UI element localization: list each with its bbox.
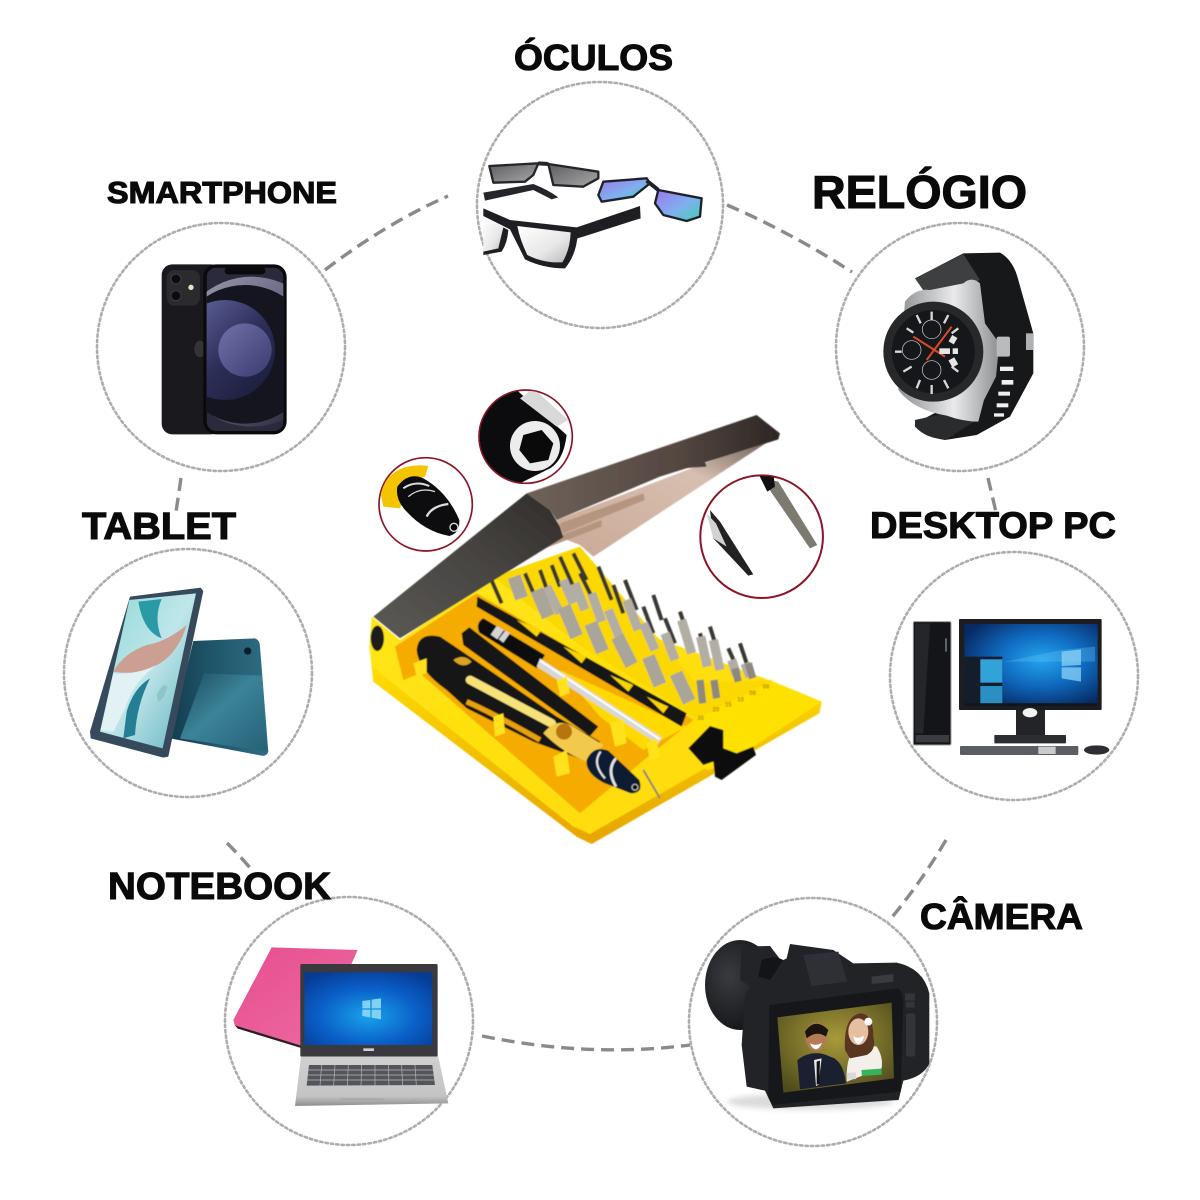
heading: desktop pc: DESKTOP PC [870,505,1116,546]
screen bezel [768,988,903,1105]
monitor [959,619,1102,710]
dashed connecting ring [176,196,996,1050]
lid band [527,415,780,520]
bit size labels: 08 [749,691,757,697]
upper temple arm [483,184,558,201]
icon: smartwatch [883,253,1033,440]
hinge [371,626,384,651]
detail circle: precision tips [700,473,823,598]
heading: câmera: CÂMERA [920,895,1083,937]
icon: tablet [90,588,268,758]
toolkit rim [372,667,822,844]
toolkit right tray [690,682,822,770]
circle: câmera [689,898,937,1146]
screwdriver handle [417,636,603,762]
circle: relógio [836,223,1084,471]
circle: notebook [225,897,473,1145]
heading: notebook: NOTEBOOK [108,866,332,908]
circle: tablet [64,549,312,797]
silver notebook base [295,1057,448,1106]
spare tip [643,770,660,798]
front tablet [90,588,203,758]
detail circle: chuck [379,458,472,551]
bit rows [490,553,753,703]
camera body [742,944,929,1108]
bit size labels [697,684,770,722]
lid underside [557,435,778,557]
circle: desktop pc [890,552,1138,800]
heading: smartphone: SMARTPHONE [107,175,337,210]
watch face [883,302,983,402]
rear phone [162,264,222,434]
icon: glasses [483,163,702,268]
blue clip-on [598,178,702,221]
icon: camera [705,940,929,1110]
lens [705,940,783,1030]
watch strap [915,253,1033,440]
watch steel case [898,280,999,422]
heading: óculos: ÓCULOS [514,36,673,78]
toolkit base [369,577,822,844]
screen photo [777,1003,894,1093]
bit size labels: 10 [737,698,745,704]
black clamp [688,726,756,780]
pink notebook [233,947,358,1048]
bit size labels: 15 [725,703,732,709]
silver notebook screen [300,964,438,1057]
back tablet [170,638,268,756]
ground shadow [727,1094,893,1110]
mouse [1084,745,1109,755]
heading: tablet: TABLET [82,506,236,548]
tray tabs [413,658,660,777]
bit size labels: 30 [697,716,705,722]
keyboard [960,746,1078,755]
strap link details [994,367,1013,417]
icon: desktop pc [913,619,1109,755]
side buttons [905,993,915,1057]
toolkit inner tray [395,593,693,813]
circle: smartphone [97,223,345,471]
dark clip-on [489,163,598,187]
monitor stand [994,708,1066,743]
screwdriver chuck [587,749,641,793]
detail circle: socket [473,388,572,483]
phone screen [206,268,284,431]
icon: iphone [162,264,287,434]
heading: relógio: RELÓGIO [812,166,1027,218]
viewfinder and dials [758,952,893,986]
front phone [203,264,287,434]
main frame [483,206,641,268]
bit holder strip [477,597,687,727]
toolkit [369,388,823,844]
lid top [373,493,563,638]
icon: notebooks [233,947,448,1106]
bit size labels: 20 [713,708,720,714]
circle: óculos [477,82,723,328]
pc tower [913,622,951,745]
bit size labels: 06 [763,684,770,690]
flexible driver [478,618,662,744]
black bar [462,627,598,736]
